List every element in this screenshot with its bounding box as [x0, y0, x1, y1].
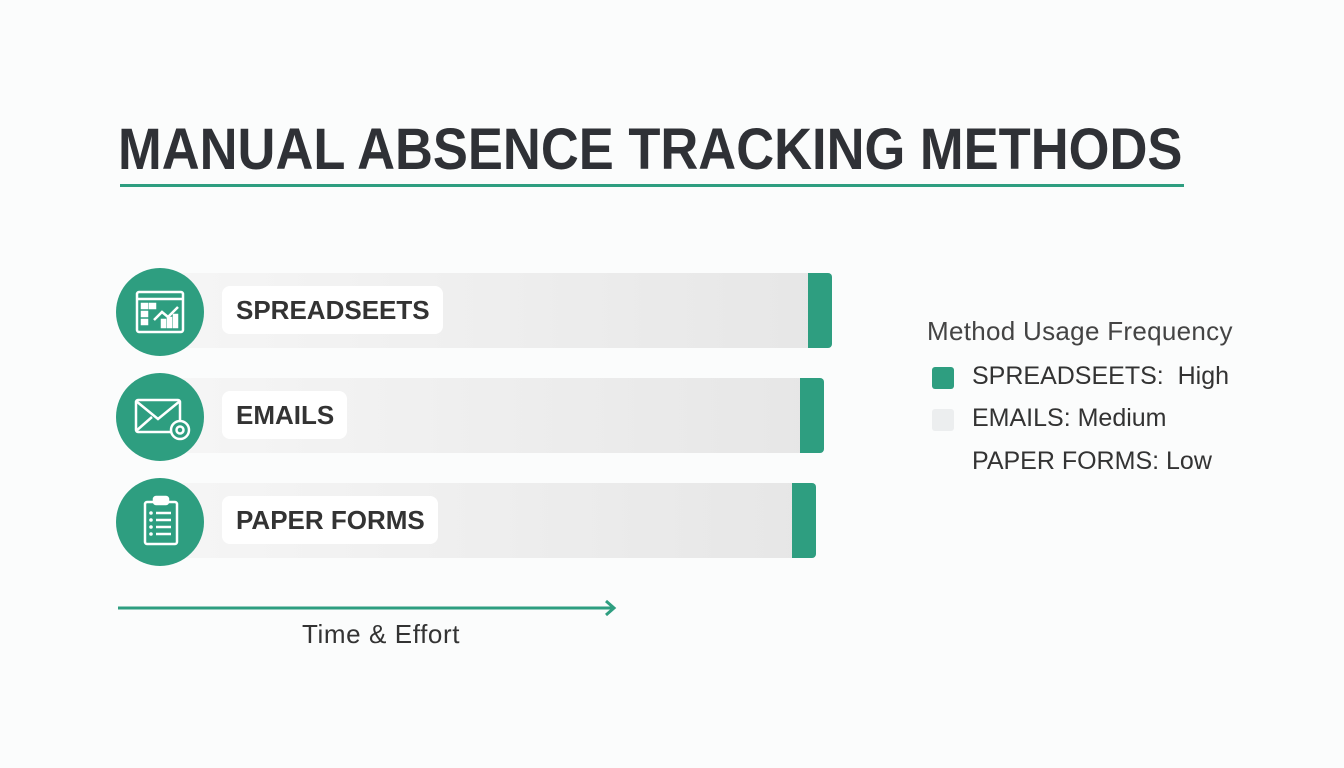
row: emails — [116, 373, 824, 461]
bar: emails — [160, 378, 824, 453]
legend: EMAILS: Medium — [972, 404, 1167, 432]
legend — [927, 316, 1233, 475]
label: emails: EMAILS — [236, 400, 334, 430]
icon: clipboard — [116, 478, 204, 566]
label: paper forms: PAPER FORMS — [236, 505, 425, 535]
label: emails — [222, 391, 347, 439]
label: spreadsheets — [222, 286, 443, 334]
arrow: time & effort — [118, 600, 616, 616]
label: paper forms — [222, 496, 438, 544]
icon: spreadsheet — [116, 268, 204, 356]
title underline — [120, 184, 1184, 187]
legend item: spreadsheets — [932, 367, 954, 389]
icon: email — [116, 373, 204, 461]
legend item: paper forms: PAPER FORMS: Low — [972, 447, 1212, 475]
row: spreadsheets — [116, 268, 832, 356]
label: spreadsheets: SPREADSEETS — [236, 295, 430, 325]
title: MANUAL ABSENCE TRACKING METHODS — [118, 117, 1182, 182]
axis label: Time & Effort — [302, 619, 460, 649]
legend item: emails — [932, 409, 954, 431]
bar: spreadsheets — [160, 273, 832, 348]
row: paper forms — [116, 478, 816, 566]
legend: SPREADSEETS: High — [972, 362, 1229, 390]
bar: paper forms — [160, 483, 816, 558]
legend title: Method Usage Frequency — [927, 316, 1233, 346]
